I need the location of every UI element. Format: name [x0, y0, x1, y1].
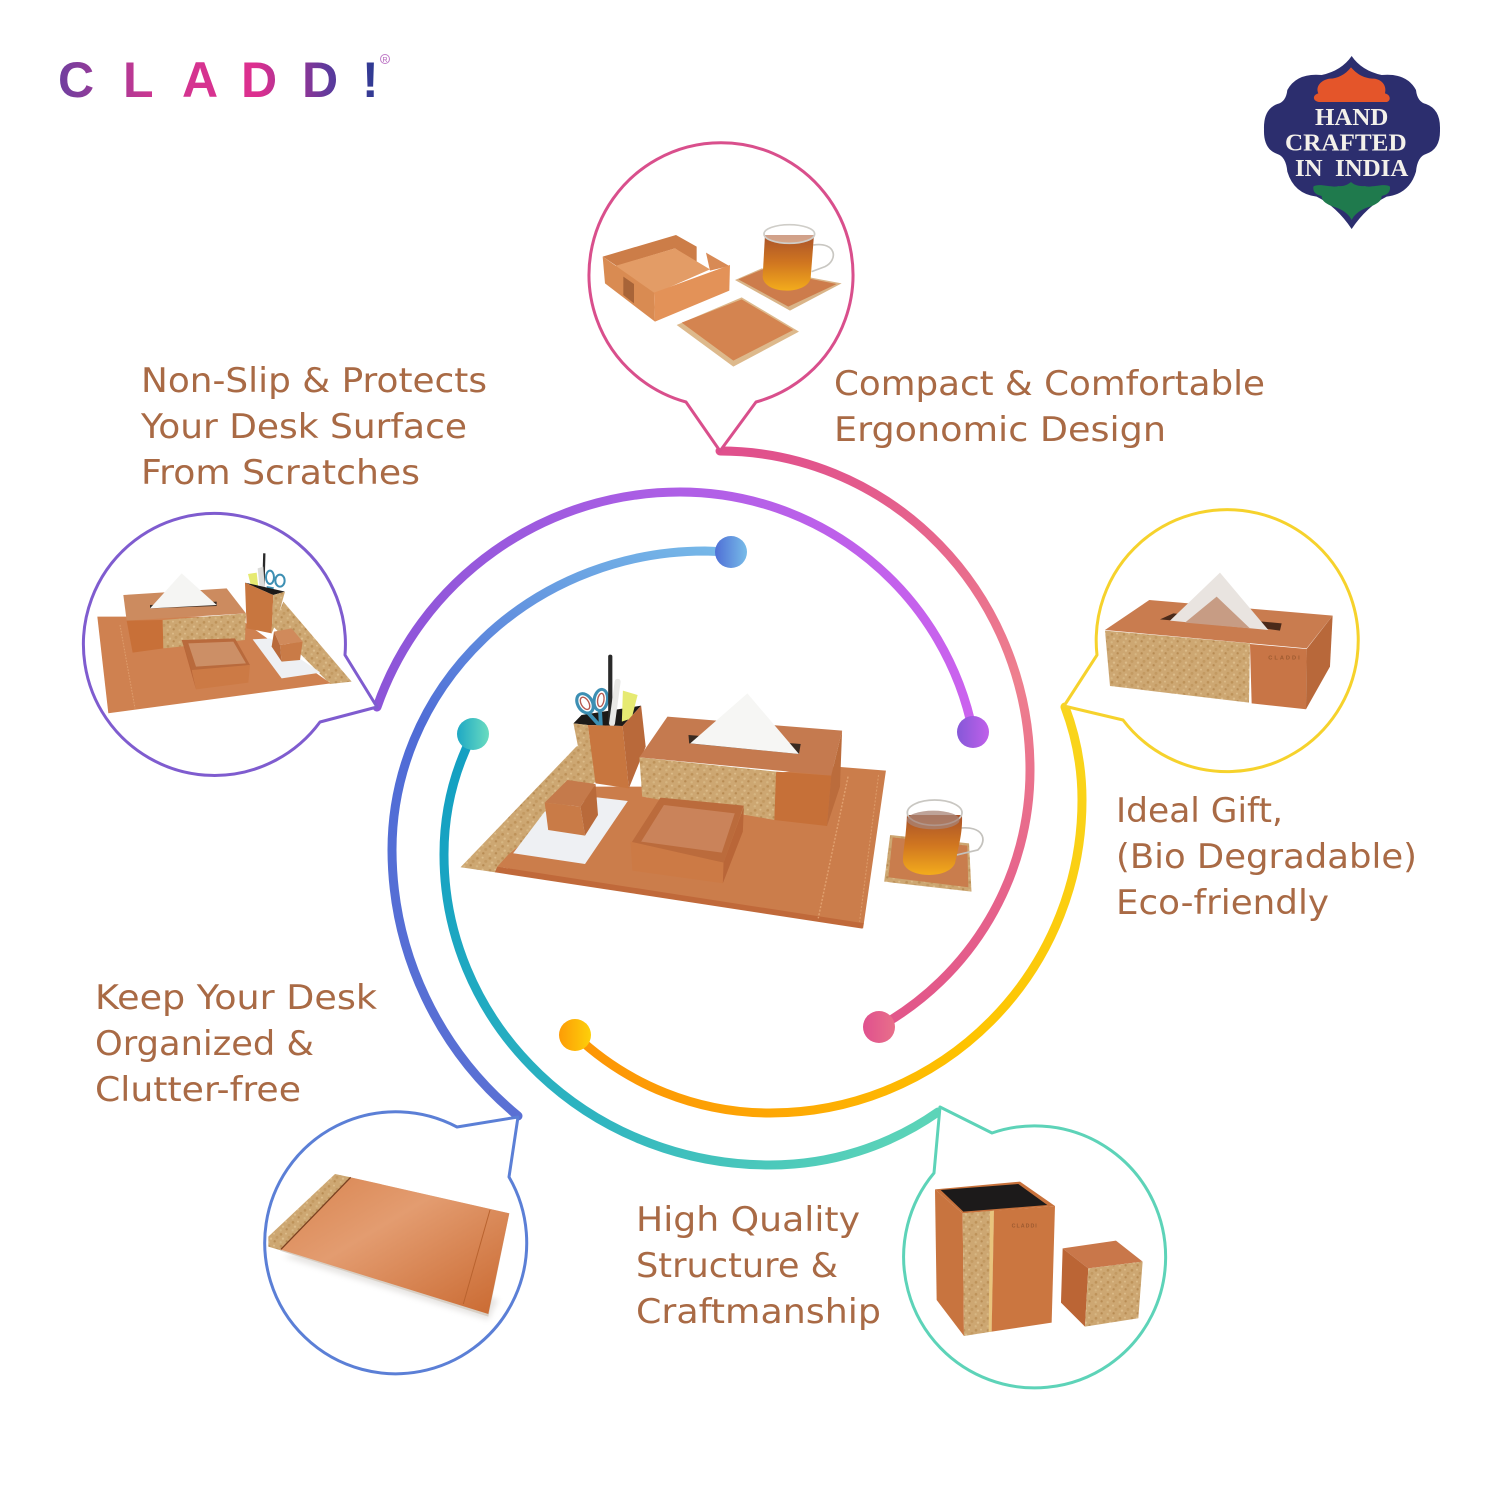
dot: orange	[559, 1019, 591, 1051]
logo: CLADDI wordmark: R	[382, 57, 388, 64]
text: compact design	[834, 364, 1265, 450]
dot: blue	[715, 536, 747, 568]
product: pen holder and cube: CLADDI	[1012, 1223, 1038, 1229]
central product: full desk set	[461, 657, 983, 929]
text: ideal gift: (Bio Degradable)	[1116, 837, 1417, 877]
text: high quality: High Quality	[636, 1200, 860, 1240]
callout bubble: pen holder and cube (teal)	[904, 1107, 1166, 1388]
product: tissue box: CLADDI	[1268, 655, 1302, 661]
text: ideal gift	[1116, 791, 1417, 923]
text: compact design: Ergonomic Design	[834, 410, 1166, 450]
badge: hand crafted in India	[1264, 56, 1440, 229]
product: desk pad	[268, 1174, 509, 1320]
dot: teal	[457, 718, 489, 750]
connector arc: yellow-orange	[575, 707, 1082, 1113]
text: keep desk organized: Organized &	[95, 1024, 314, 1064]
connector arc: blue	[392, 551, 731, 1116]
text: non-slip: Non-Slip & Protects	[141, 361, 487, 401]
text: high quality	[636, 1200, 881, 1332]
badge: hand crafted in India: HAND	[1315, 105, 1388, 131]
text: keep desk organized: Keep Your Desk	[95, 978, 377, 1018]
callout bubble: desk set (purple)	[83, 513, 377, 775]
badge: hand crafted in India: IN INDIA	[1295, 156, 1409, 182]
product: tissue box	[1105, 573, 1333, 709]
text: keep desk organized: Clutter-free	[95, 1070, 301, 1110]
callout bubble: desk pad (blue)	[265, 1112, 527, 1374]
product: desk set	[97, 553, 352, 713]
dot: pink	[863, 1011, 895, 1043]
text: high quality: Structure &	[636, 1246, 838, 1286]
logo: CLADDI wordmark: CLADD!	[58, 52, 379, 108]
callout bubble: coasters (pink)	[589, 143, 853, 451]
badge: hand crafted in India: CRAFTED	[1285, 131, 1407, 157]
product: coaster set	[603, 225, 842, 367]
text: compact design: Compact & Comfortable	[834, 364, 1265, 404]
text: ideal gift: Ideal Gift,	[1116, 791, 1283, 831]
product: pen holder and cube	[935, 1182, 1143, 1336]
text: non-slip: From Scratches	[141, 453, 420, 493]
text: high quality: Craftmanship	[636, 1292, 881, 1332]
text: non-slip	[140, 361, 487, 493]
connector arc: purple	[377, 492, 973, 732]
dot: purple	[957, 716, 989, 748]
text: non-slip: Your Desk Surface	[140, 407, 467, 447]
text: keep desk organized	[95, 978, 377, 1110]
callout bubble: tissue box (yellow)	[1064, 510, 1358, 772]
connector arc: pink	[720, 451, 1030, 1027]
connector arc: teal	[444, 734, 938, 1165]
text: ideal gift: Eco-friendly	[1116, 883, 1329, 923]
